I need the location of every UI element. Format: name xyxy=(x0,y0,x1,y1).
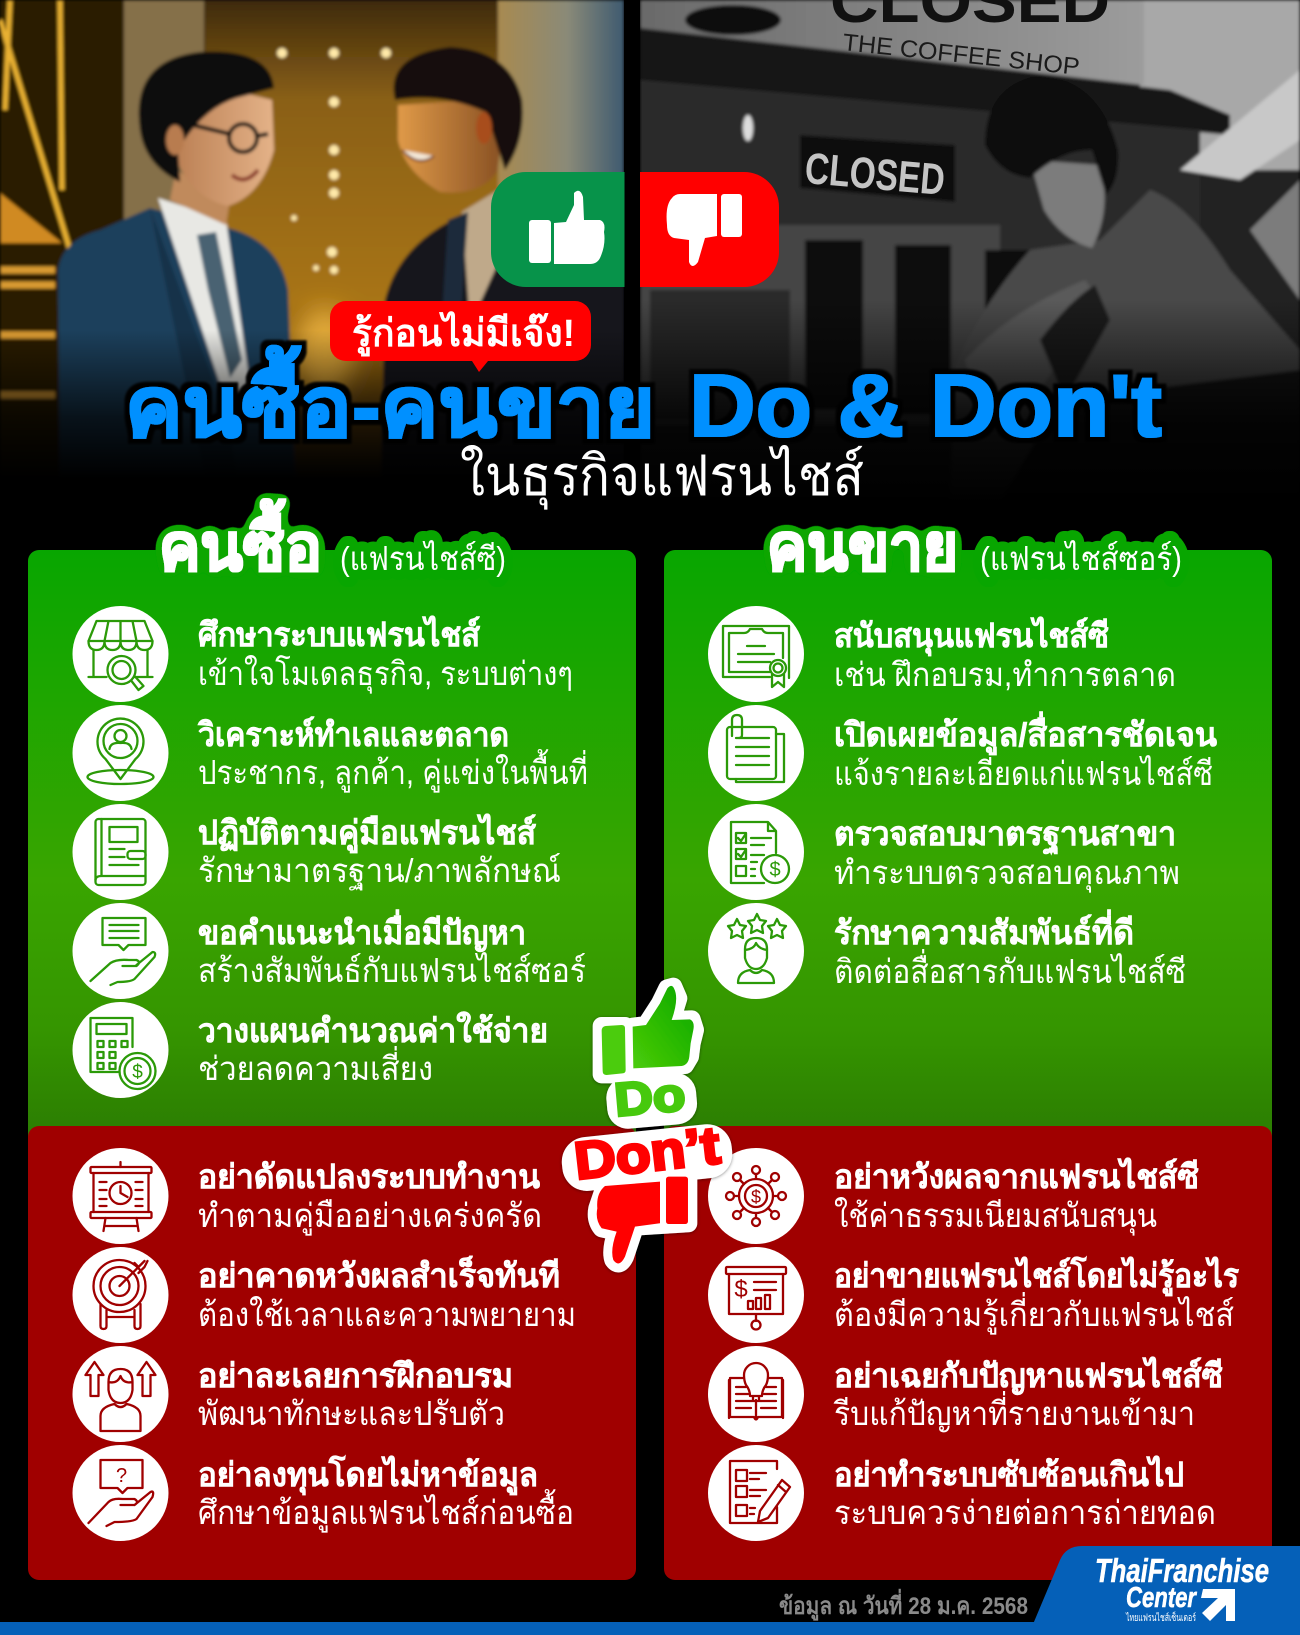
text xyxy=(834,1157,1199,1236)
text: อย่าคาดหวังผลสำเร็จทันที xyxy=(198,1255,560,1294)
photo: closed coffee shop with sad man xyxy=(640,0,1300,444)
subtitle: ในธุรกิจแฟรนไชส์ xyxy=(460,444,864,510)
item: don't ignore training xyxy=(72,1346,513,1442)
item: study system xyxy=(72,606,573,702)
icon: calculator with coin xyxy=(90,1018,156,1089)
text xyxy=(834,1256,1239,1335)
text: พัฒนาทักษะและปรับตัว xyxy=(198,1395,505,1432)
item: inspect standards xyxy=(708,804,1180,900)
text xyxy=(198,1255,576,1333)
logo: ThaiFranchise Center: ไทยแฟรนไชส์เซ็นเตอร์ xyxy=(1125,1610,1196,1624)
icon: checklist with coin: $ xyxy=(769,859,781,881)
text: ปฏิบัติตามคู่มือแฟรนไชส์ xyxy=(198,813,537,854)
text: อย่าขายแฟรนไชส์โดยไม่รู้อะไร xyxy=(834,1256,1239,1297)
text: ตรวจสอบมาตรฐานสาขา xyxy=(834,815,1176,855)
text: ศึกษาระบบแฟรนไชส์ xyxy=(198,615,481,653)
text: อย่าทำระบบซับซ้อนเกินไป xyxy=(834,1455,1184,1493)
text: ทำระบบตรวจสอบคุณภาพ xyxy=(834,854,1180,893)
panel: sellers do xyxy=(664,510,1272,1150)
sticker word: do: Do xyxy=(612,1068,687,1126)
text xyxy=(198,1455,574,1533)
text xyxy=(198,909,586,989)
date note: ข้อมูล ณ วันที่ 28 ม.ค. 2568 xyxy=(779,1588,1028,1621)
text xyxy=(198,1357,513,1432)
item: don't sell without knowledge xyxy=(708,1247,1239,1343)
item: maintain relationship xyxy=(708,903,1186,999)
text: อย่าหวังผลจากแฟรนไชส์ซี xyxy=(834,1157,1199,1195)
icon: logo arrow xyxy=(1201,1589,1235,1621)
thumbs down badge xyxy=(640,172,779,287)
text xyxy=(834,616,1176,693)
icon: person with up arrows xyxy=(86,1362,156,1431)
icon: hand with question bubble: ? xyxy=(116,1465,127,1487)
icon: shop with magnifier xyxy=(88,621,152,690)
icon: presentation board xyxy=(90,1162,152,1231)
text: ติดต่อสื่อสารกับแฟรนไชส์ซี xyxy=(834,949,1186,990)
text: ใช้ค่าธรรมเนียมสนับสนุน xyxy=(834,1197,1157,1236)
icon: dollar chart board xyxy=(726,1267,786,1330)
icon: dollar network xyxy=(726,1166,786,1226)
text: ระบบควรง่ายต่อการถ่ายทอด xyxy=(834,1494,1216,1531)
text xyxy=(834,909,1186,990)
heading: buyers: (แฟรนไชส์ซี) xyxy=(340,540,506,577)
logo: ThaiFranchise Center xyxy=(1034,1546,1300,1624)
logo: ThaiFranchise Center: Center xyxy=(1126,1582,1197,1614)
text: อย่าดัดแปลงระบบทำงาน xyxy=(198,1158,540,1195)
icon: calculator with coin: $ xyxy=(132,1062,143,1083)
heading: buyers: คนซื้อ xyxy=(159,498,322,584)
text xyxy=(198,1011,548,1087)
icon: clipped documents xyxy=(727,715,784,782)
text xyxy=(198,1158,542,1236)
icon: hand with speech bubble xyxy=(90,918,155,985)
icon: checklist and pencil xyxy=(730,1461,790,1523)
text xyxy=(198,615,573,694)
photo fade left xyxy=(0,330,630,505)
text: รักษาความสัมพันธ์ที่ดี xyxy=(834,909,1134,951)
icon: certificate xyxy=(723,626,789,687)
text: รีบแก้ปัญหาที่รายงานเข้ามา xyxy=(833,1391,1195,1432)
panel: sellers don't xyxy=(664,1126,1272,1580)
text: ช่วยลดความเสี่ยง xyxy=(198,1046,433,1087)
callout: know before you fail xyxy=(330,301,591,372)
text: รักษามาตรฐาน/ภาพลักษณ์ xyxy=(198,852,561,891)
item: don't expect instant success xyxy=(72,1247,576,1343)
photo sign text: CLOSED xyxy=(803,144,947,205)
item: don't invest without data xyxy=(72,1445,574,1541)
text: วิเคราะห์ทำเลและตลาด xyxy=(198,716,509,753)
icon: location pin xyxy=(88,719,154,784)
item: disclose information xyxy=(708,705,1217,801)
text xyxy=(834,1455,1216,1531)
text xyxy=(198,813,561,891)
item: don't overcomplicate xyxy=(708,1445,1216,1541)
panel: buyers do xyxy=(28,498,636,1150)
text xyxy=(834,815,1180,893)
thumbs up badge xyxy=(491,172,624,287)
text: อย่าลงทุนโดยไม่หาข้อมูล xyxy=(198,1455,538,1496)
item: support franchisee xyxy=(708,606,1176,702)
item: don't expect results from franchisee xyxy=(708,1148,1199,1244)
text: สนับสนุนแฟรนไชส์ซี xyxy=(834,616,1109,657)
icon: dollar chart board: $ xyxy=(734,1276,748,1303)
item: don't ignore problems xyxy=(708,1346,1223,1442)
item: analyse location xyxy=(72,705,588,801)
text: วางแผนคำนวณค่าใช้จ่าย xyxy=(198,1011,548,1049)
heading: buyers xyxy=(159,498,506,584)
text xyxy=(834,711,1217,792)
text: เช่น ฝึกอบรม,ทำการตลาด xyxy=(834,656,1176,693)
sticker: don't thumbs down xyxy=(559,1116,735,1263)
text: เปิดเผยข้อมูล/สื่อสารชัดเจน xyxy=(834,711,1217,756)
photo sign coffee shop: THE COFFEE SHOP xyxy=(841,29,1081,81)
sticker: do thumbs up xyxy=(602,986,699,1130)
item: plan costs xyxy=(72,1002,548,1098)
icon: book with light bulb xyxy=(729,1363,783,1420)
panel: buyers don't xyxy=(28,1126,636,1580)
heading: sellers: (แฟรนไชส์ซอร์) xyxy=(980,540,1182,577)
text: แจ้งรายละเอียดแก่แฟรนไชส์ซี xyxy=(834,755,1213,792)
text: ขอคำแนะนำเมื่อมีปัญหา xyxy=(198,909,526,952)
text: สร้างสัมพันธ์กับแฟรนไชส์ซอร์ xyxy=(198,952,586,989)
text: ต้องใช้เวลาและความพยายาม xyxy=(198,1296,576,1333)
icon: target and arrow xyxy=(94,1260,148,1329)
photo: two happy businessmen xyxy=(0,0,624,500)
footer bar xyxy=(0,1622,1300,1635)
text: เข้าใจโมเดลธุรกิจ, ระบบต่างๆ xyxy=(198,655,573,694)
sticker word: don't: Don’t xyxy=(571,1116,723,1191)
item: don't modify system xyxy=(72,1148,542,1244)
text: ต้องมีความรู้เกี่ยวกับแฟรนไชส์ xyxy=(834,1292,1234,1335)
title xyxy=(125,345,1162,455)
photo fade right xyxy=(630,300,1300,505)
icon: dollar network: $ xyxy=(751,1187,761,1207)
item: ask for advice xyxy=(72,903,586,999)
text: ทำตามคู่มืออย่างเคร่งครัด xyxy=(198,1197,542,1236)
heading: sellers xyxy=(767,510,1182,584)
text: ศึกษาข้อมูลแฟรนไชส์ก่อนซื้อ xyxy=(198,1489,574,1533)
callout: know before you fail: รู้ก่อนไม่มีเจ๊ง! xyxy=(352,311,575,357)
icon: stars and person xyxy=(728,914,786,983)
icon: hand with question bubble xyxy=(88,1460,153,1526)
text xyxy=(833,1356,1223,1432)
text xyxy=(198,716,588,793)
icon: manual book xyxy=(96,819,146,885)
text: อย่าละเลยการฝึกอบรม xyxy=(198,1357,513,1394)
title: คนซื้อ-คนขาย xyxy=(125,345,655,454)
text: อย่าเฉยกับปัญหาแฟรนไชส์ซี xyxy=(834,1356,1223,1395)
title: Do & Don't xyxy=(689,356,1162,455)
icon: checklist with coin xyxy=(731,822,789,883)
heading: sellers: คนขาย xyxy=(767,510,958,584)
item: follow manual xyxy=(72,804,561,900)
text: ประชากร, ลูกค้า, คู่แข่งในพื้นที่ xyxy=(198,749,588,793)
